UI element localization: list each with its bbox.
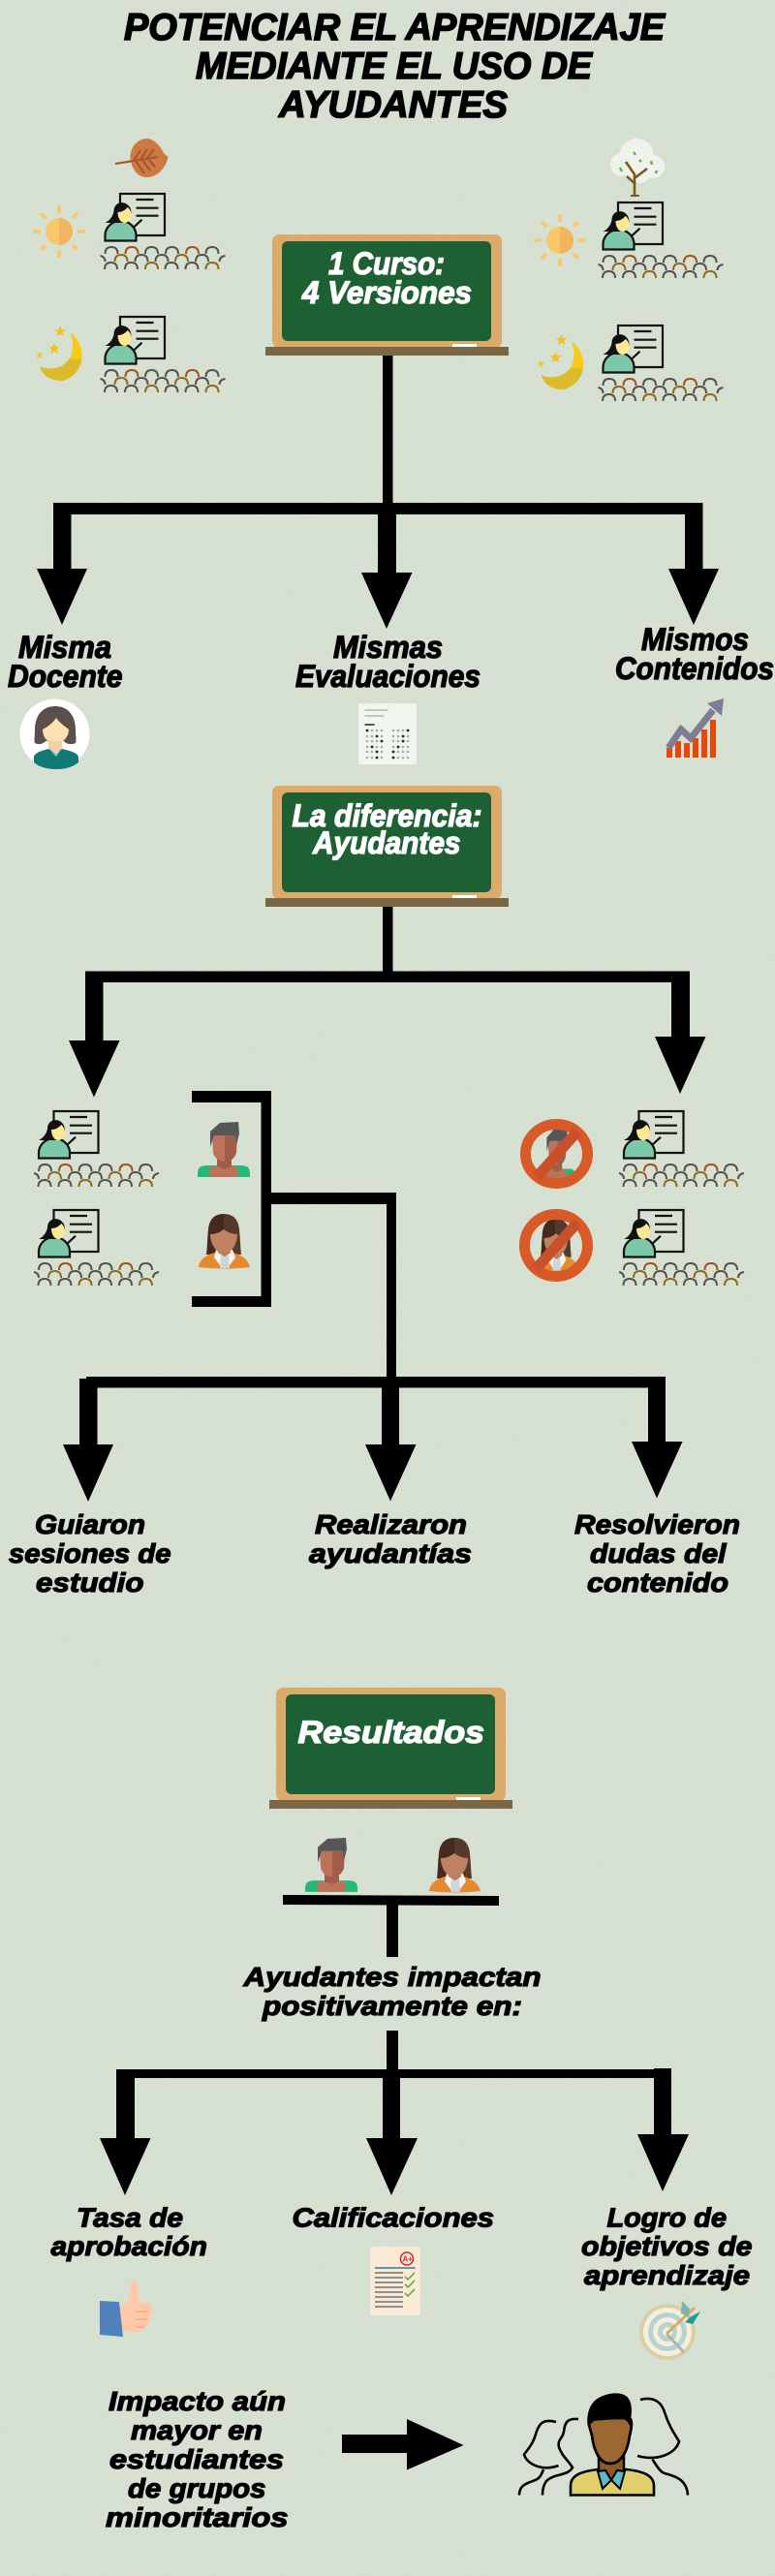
icon: evening moon right — [538, 334, 583, 389]
blackboard: la diferencia, ayudantes — [265, 786, 509, 907]
label: mismos contenidos: Mismos — [641, 622, 749, 657]
label: resolvieron dudas del contenido: contenido — [587, 1567, 728, 1598]
title: POTENCIAR EL APRENDIZAJE — [124, 7, 666, 48]
icon: teacher and class, without assistant 2 — [619, 1210, 744, 1286]
blackboard: 1 curso, 4 versiones — [265, 234, 509, 356]
label: mismas evaluaciones — [295, 630, 480, 694]
label: guiaron sesiones de estudio: estudio — [36, 1567, 143, 1598]
icon: teacher and class, morning left — [101, 194, 225, 269]
label: resolvieron dudas del contenido — [574, 1509, 740, 1598]
label: logro de objetivos de aprendizaje: aprendizaje — [584, 2260, 750, 2290]
text: impacto aun mayor en estudiantes de grupos minoritarios — [106, 2386, 289, 2532]
icon: teacher and class, with assistant 2 — [34, 1210, 159, 1286]
blackboard: la diferencia, ayudantes: La diferencia: — [293, 798, 482, 833]
title: MEDIANTE EL USO DE — [196, 46, 593, 87]
label: realizaron ayudantias — [309, 1509, 472, 1568]
blackboard: la diferencia, ayudantes: Ayudantes — [312, 825, 461, 860]
blackboard: 1 curso, 4 versiones: 4 Versiones — [301, 275, 472, 310]
label: realizaron ayudantias: ayudantías — [309, 1538, 472, 1568]
icon: target with arrow — [639, 2301, 700, 2360]
text: impacto aun mayor en estudiantes de grupos minoritarios: minoritarios — [106, 2502, 289, 2532]
icon: male assistant — [198, 1122, 250, 1177]
label: mismas evaluaciones: Mismas — [333, 630, 443, 665]
label: logro de objetivos de aprendizaje — [581, 2203, 752, 2290]
icon: evening moon left — [37, 326, 82, 381]
arrows: three-way split to outcomes — [100, 2031, 689, 2195]
text: impacto aun mayor en estudiantes de grupos minoritarios: mayor en — [131, 2415, 263, 2445]
icon: teacher and class, with assistant 1 — [34, 1111, 159, 1187]
label: guiaron sesiones de estudio: Guiaron — [35, 1509, 145, 1539]
icon: no female assistant — [525, 1215, 587, 1277]
label: mismos contenidos — [615, 622, 774, 686]
icon: morning sun left — [33, 205, 85, 258]
arrows: three-way split to assistant activities — [63, 1377, 682, 1502]
label: misma docente — [8, 630, 122, 694]
icon: spring tree — [610, 139, 665, 196]
label: resolvieron dudas del contenido: Resolvieron — [574, 1509, 740, 1539]
label: tasa de aprobacion — [50, 2203, 207, 2261]
title — [124, 7, 666, 126]
label: logro de objetivos de aprendizaje: objetivos de — [581, 2231, 752, 2261]
label: guiaron sesiones de estudio: sesiones de — [9, 1538, 170, 1568]
icon: no male assistant — [525, 1124, 587, 1184]
icon: minority student group — [519, 2393, 688, 2496]
text: impacto aun mayor en estudiantes de grupos minoritarios: de grupos — [128, 2473, 265, 2503]
label: realizaron ayudantias: Realizaron — [315, 1509, 467, 1539]
icon: test answer sheet — [358, 703, 417, 764]
icon: thumbs up — [100, 2281, 152, 2337]
icon: teacher and class, evening right — [599, 326, 723, 401]
arrows: three-way split from first board — [37, 356, 719, 629]
icon: female assistant — [199, 1214, 250, 1269]
bracket connector to activities — [192, 1091, 396, 1379]
label: misma docente: Misma — [18, 630, 111, 665]
arrow: to minority students — [342, 2419, 463, 2470]
icon: graded paper: A+ — [403, 2255, 413, 2263]
blackboard: resultados — [269, 1688, 512, 1809]
icon: male assistant, results — [305, 1838, 357, 1892]
icon: teacher and class, without assistant 1 — [619, 1111, 744, 1187]
arrows: two-way split from second board — [69, 907, 705, 1097]
label: misma docente: Docente — [8, 659, 122, 694]
icon: autumn leaf — [115, 139, 169, 177]
icon: female assistant, results — [429, 1838, 480, 1893]
text: ayudantes impactan positivamente en: Ayudantes impactan — [242, 1962, 542, 1992]
title: AYUDANTES — [278, 84, 508, 126]
icon: teacher portrait — [19, 699, 89, 769]
icon: graded paper — [370, 2247, 420, 2315]
label: guiaron sesiones de estudio — [9, 1509, 170, 1598]
text: impacto aun mayor en estudiantes de grupos minoritarios: Impacto aún — [108, 2386, 286, 2416]
icon: rising bar chart — [666, 698, 724, 758]
connector from assistants to impact text — [283, 1895, 499, 1957]
text: impacto aun mayor en estudiantes de grupos minoritarios: estudiantes — [109, 2444, 284, 2474]
label: resolvieron dudas del contenido: dudas del — [590, 1538, 728, 1568]
label: logro de objetivos de aprendizaje: Logro de — [606, 2203, 727, 2232]
icon: teacher and class, evening left — [101, 317, 225, 392]
label: tasa de aprobacion: aprobación — [50, 2231, 207, 2261]
blackboard: resultados: Resultados — [298, 1715, 484, 1750]
blackboard: 1 curso, 4 versiones: 1 Curso: — [328, 246, 445, 281]
label: tasa de aprobacion: Tasa de — [77, 2203, 183, 2232]
text: ayudantes impactan positivamente en — [242, 1962, 542, 2021]
label: mismas evaluaciones: Evaluaciones — [295, 659, 480, 694]
label: calificaciones: Calificaciones — [293, 2203, 494, 2232]
icon: morning sun right — [534, 214, 586, 266]
text: ayudantes impactan positivamente en: positivamente en: — [262, 1991, 522, 2021]
icon: teacher and class, morning right — [599, 202, 723, 278]
